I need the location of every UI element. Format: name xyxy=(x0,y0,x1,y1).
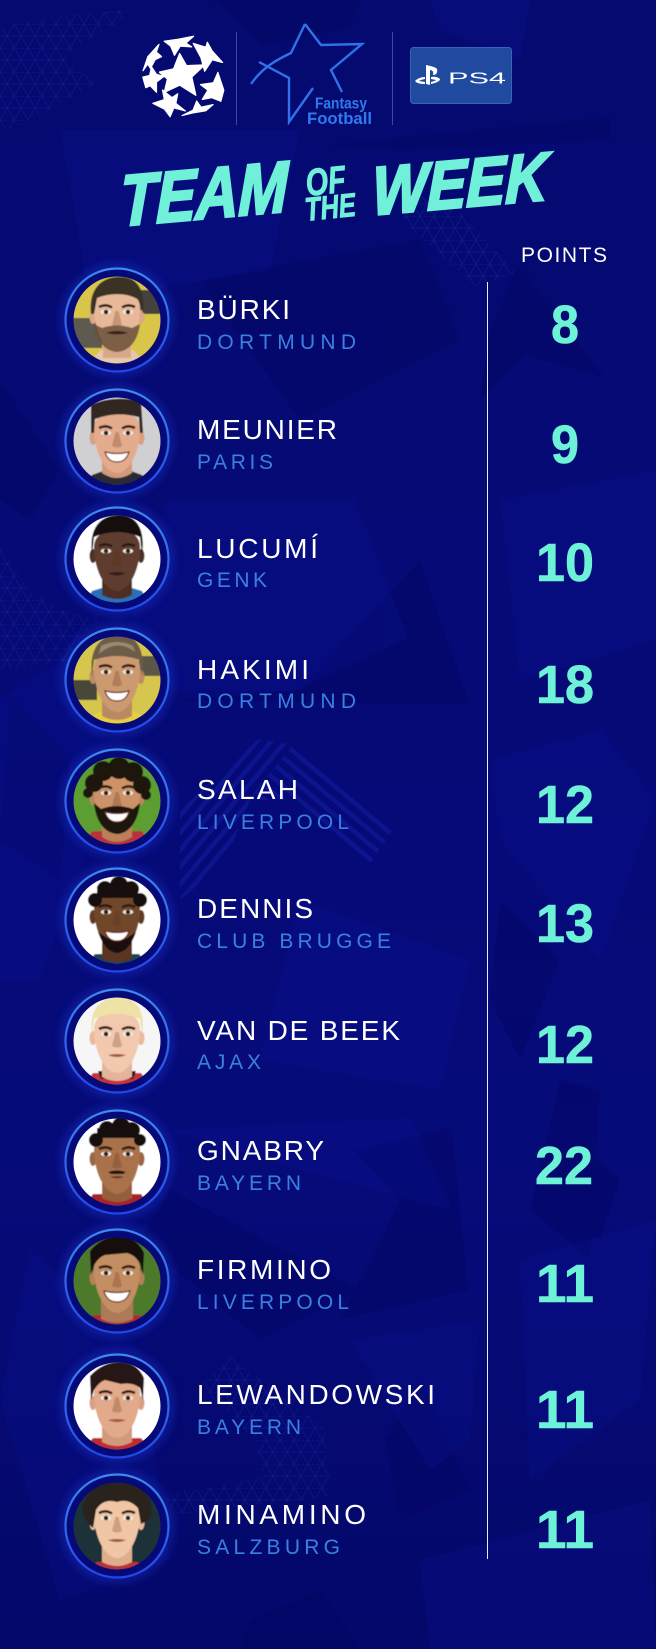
club: DORTMUND xyxy=(197,690,356,713)
player row: Minamino xyxy=(65,1474,594,1578)
avatar xyxy=(65,507,169,611)
avatar xyxy=(65,389,169,493)
player row: Gnabry xyxy=(65,1110,593,1214)
title: OF xyxy=(304,159,349,205)
club: BAYERN xyxy=(197,1416,301,1439)
club: AJAX xyxy=(197,1051,261,1074)
avatar xyxy=(65,749,169,853)
avatar xyxy=(65,1110,169,1214)
club: CLUB BRUGGE xyxy=(197,930,391,953)
player row: Dennis xyxy=(65,868,594,972)
club: GENK xyxy=(197,569,267,592)
avatar xyxy=(65,1229,169,1333)
club: LIVERPOOL xyxy=(197,811,349,834)
player row: Van de Beek xyxy=(65,989,594,1093)
avatar xyxy=(65,628,169,732)
name: DENNIS xyxy=(197,893,313,924)
player row: Lewandowski xyxy=(65,1354,594,1458)
title: TEAM xyxy=(120,147,290,242)
points heading: POINTS xyxy=(521,244,607,267)
points: 13 xyxy=(536,894,594,954)
player row: Hakimi xyxy=(65,628,594,732)
name: BÜRKI xyxy=(197,294,290,325)
name: LUCUMÍ xyxy=(197,533,318,564)
logo: Fantasy Football star: Fantasy xyxy=(315,96,367,112)
title: THE xyxy=(303,186,358,228)
avatar xyxy=(65,868,169,972)
avatar xyxy=(65,1474,169,1578)
player row: Bürki xyxy=(65,268,579,372)
logo: PS4 badge: PS4 xyxy=(448,70,506,88)
points: 8 xyxy=(551,295,579,355)
points: 12 xyxy=(536,775,594,835)
name: FIRMINO xyxy=(197,1254,331,1285)
name: VAN DE BEEK xyxy=(197,1015,400,1046)
points: 11 xyxy=(536,1500,594,1560)
avatar xyxy=(65,989,169,1093)
logo: Fantasy Football star: Football xyxy=(307,109,372,128)
logo: Fantasy Football star xyxy=(251,24,372,128)
club: BAYERN xyxy=(197,1172,301,1195)
name: MINAMINO xyxy=(197,1499,366,1530)
avatar xyxy=(65,1354,169,1458)
divider xyxy=(392,32,393,125)
player row: Lucumí xyxy=(65,507,594,611)
divider xyxy=(236,32,237,125)
avatar xyxy=(65,268,169,372)
logo: PS4 badge xyxy=(410,48,512,104)
divider line xyxy=(487,282,488,1559)
club: LIVERPOOL xyxy=(197,1291,349,1314)
name: MEUNIER xyxy=(197,414,337,445)
title xyxy=(120,138,552,242)
name: SALAH xyxy=(197,774,298,805)
points: 11 xyxy=(536,1380,594,1440)
points: 11 xyxy=(536,1254,594,1314)
points: 9 xyxy=(551,415,579,475)
points: 10 xyxy=(536,533,594,593)
logo: Champions League starball xyxy=(143,36,224,117)
club: DORTMUND xyxy=(197,331,356,354)
name: HAKIMI xyxy=(197,654,309,685)
player row: Salah xyxy=(65,749,594,853)
club: PARIS xyxy=(197,451,273,474)
name: GNABRY xyxy=(197,1135,324,1166)
player row: Meunier xyxy=(65,389,579,493)
name: LEWANDOWSKI xyxy=(197,1379,435,1410)
player row: Firmino xyxy=(65,1229,594,1333)
points: 22 xyxy=(535,1136,593,1196)
title: WEEK xyxy=(372,138,552,230)
club: SALZBURG xyxy=(197,1536,340,1559)
points: 18 xyxy=(536,655,594,715)
points: 12 xyxy=(536,1015,594,1075)
